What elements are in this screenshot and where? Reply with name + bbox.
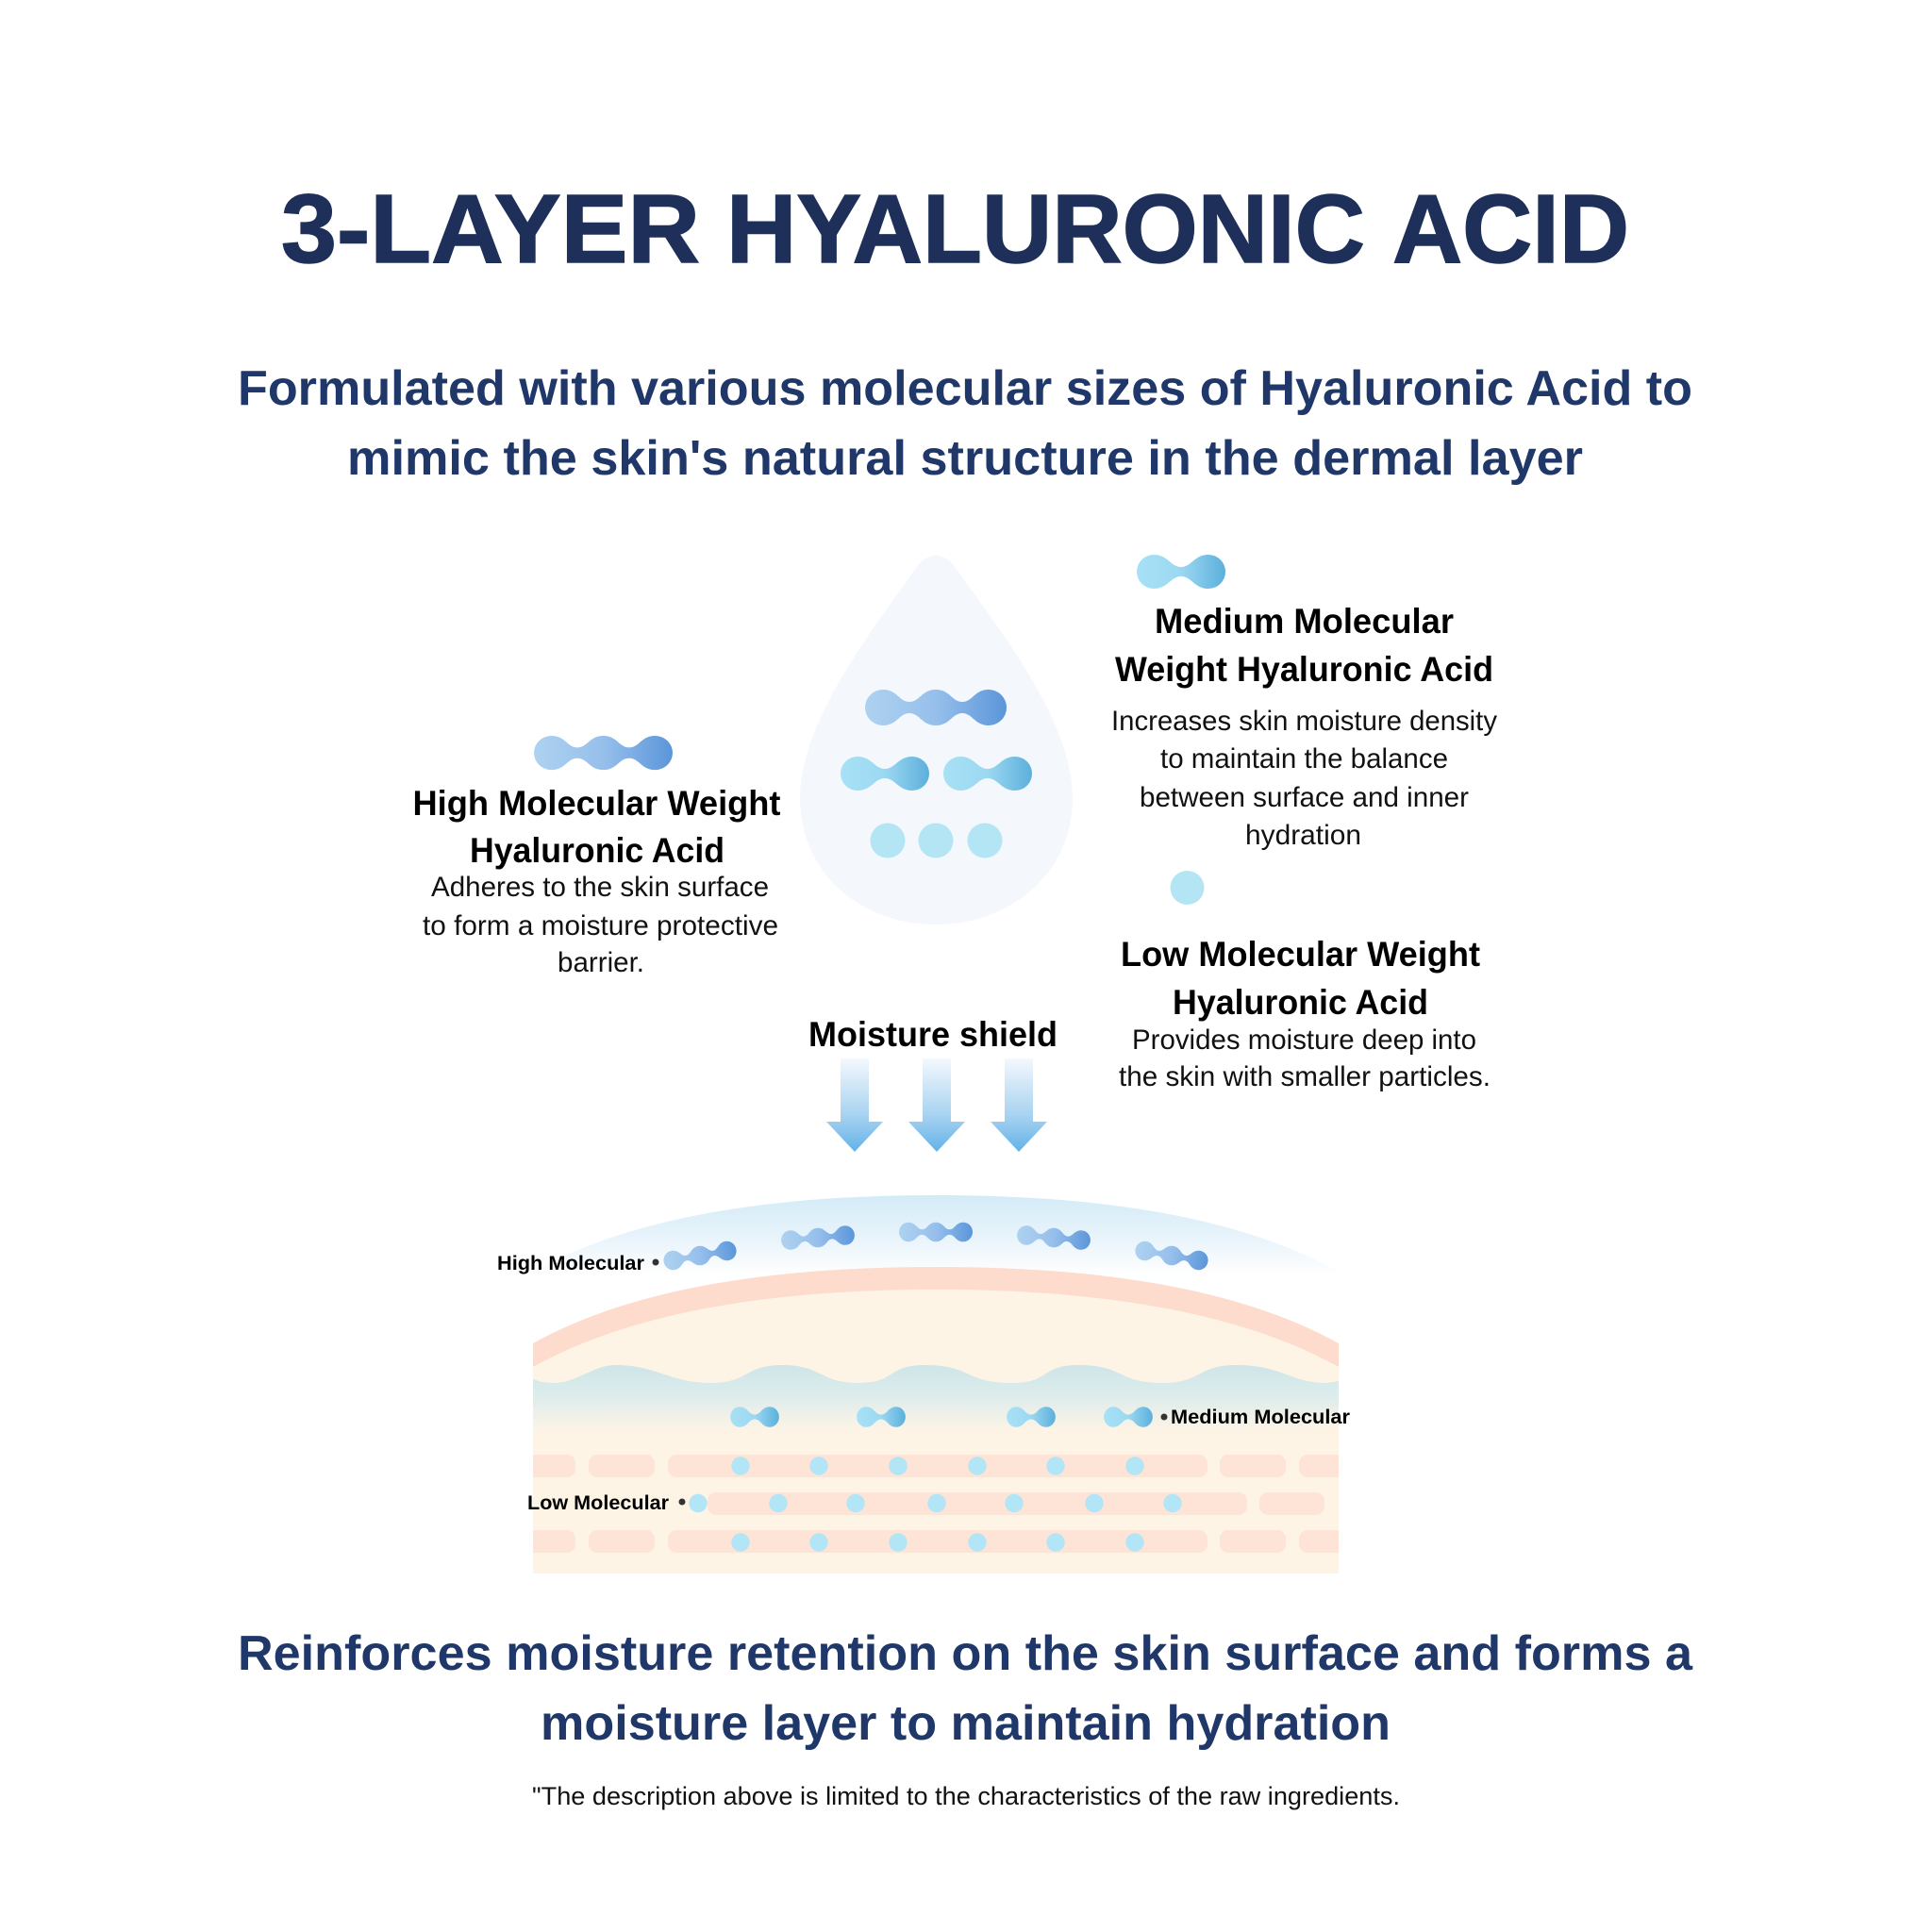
subtitle: mimic the skin's natural structure in the dermal layer [347,431,1583,486]
heading: high molecular: Hyaluronic Acid [470,831,724,870]
icon: medium molecule [1137,555,1225,589]
icon: water drop with molecules [800,556,1073,924]
heading: moisture shield: Moisture shield [808,1015,1058,1054]
arrow 3 [991,1058,1047,1152]
heading: high molecular: High Molecular Weight [413,784,781,823]
heading: high molecular [413,784,781,870]
low molecule dots [689,1457,1182,1552]
conclusion text [238,1626,1693,1751]
arrow 1 [826,1058,883,1152]
skin body [533,1290,1339,1574]
heading: low molecular [1121,935,1480,1022]
skin surface band [533,1267,1339,1367]
text: high molecular description: Adheres to the skin surface [431,872,769,903]
conclusion text: Reinforces moisture retention on the skin surface and forms a [238,1626,1693,1681]
icon: low molecule [1170,871,1204,905]
panel: low molecular weight [1119,871,1491,1092]
heading: low molecular: Hyaluronic Acid [1173,983,1428,1022]
text: medium molecular description: hydration [1245,820,1361,851]
text: high molecular description: to form a moisture protective [423,910,778,941]
icon: high molecule [534,736,673,770]
text: low molecular description: the skin with smaller particles. [1119,1061,1491,1092]
text: medium molecular description: between surface and inner [1140,782,1469,813]
title: 3-LAYER [281,175,700,283]
heading: medium molecular: Weight Hyaluronic Acid [1115,650,1493,689]
medium molecules in skin [730,1407,1153,1427]
text: low molecular description [1119,1024,1491,1092]
high molecules in dome [662,1223,1209,1272]
title: HYALURONIC [726,175,1365,283]
panel: high molecular weight [413,736,781,978]
text: low molecular description: Provides moisture deep into [1132,1024,1476,1056]
panel: medium molecular weight [1111,555,1497,851]
text: medium molecular description: Increases skin moisture density [1111,706,1497,737]
conclusion text: moisture layer to maintain hydration [541,1696,1391,1751]
title: ACID [1392,175,1629,283]
footnote: "The description above is limited to the characteristics of the raw ingredients. [532,1782,1400,1810]
arrow 2 [908,1058,965,1152]
text: medium molecular description: to maintain the balance [1160,743,1448,774]
arrows: moisture shield [826,1058,1047,1152]
label: medium molecular: Medium Molecular [1171,1407,1350,1428]
heading: low molecular: Low Molecular Weight [1121,935,1480,974]
heading: medium molecular [1115,602,1493,689]
subtitle [238,361,1692,486]
text: medium molecular description [1111,706,1497,851]
text: high molecular description: barrier. [558,947,644,978]
label: high molecular: High Molecular [497,1253,644,1274]
label: low molecular: Low Molecular [527,1492,669,1514]
text: high molecular description [423,872,778,978]
cell rows [533,1455,1339,1553]
moisture dome [533,1195,1339,1275]
wave layer [533,1365,1339,1431]
diagram: skin cross-section [497,1195,1350,1574]
title [281,175,1629,283]
subtitle: Formulated with various molecular sizes of Hyaluronic Acid to [238,361,1692,416]
heading: medium molecular: Medium Molecular [1155,602,1454,641]
